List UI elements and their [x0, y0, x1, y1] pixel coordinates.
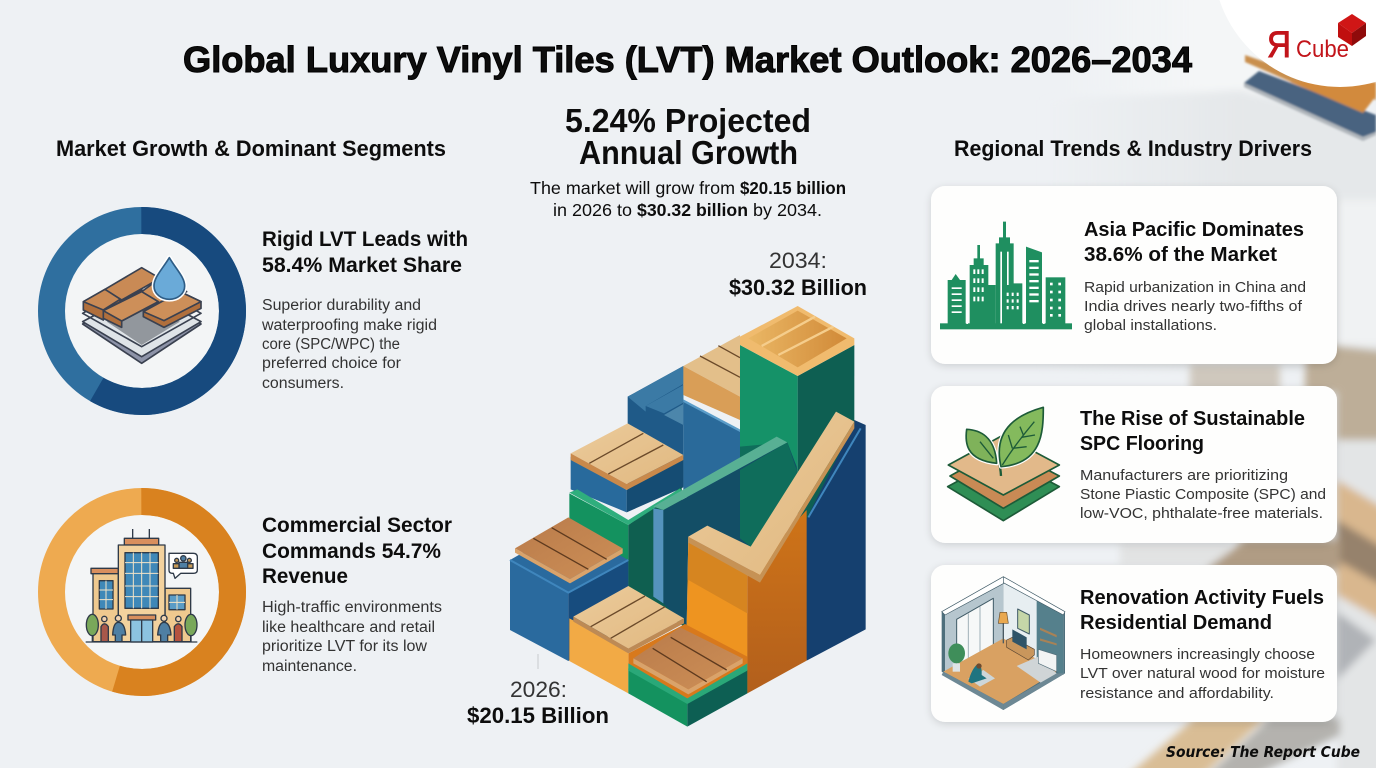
text: commercial description: High-traffic environments — [262, 599, 442, 616]
panel: projected growth — [467, 102, 867, 728]
text: Asia Pacific heading: Asia Pacific Dominates — [1084, 218, 1304, 241]
heading: left: Market Growth & Dominant Segments — [56, 136, 446, 161]
text: commercial description: like healthcare and retail — [262, 619, 435, 636]
chart: isometric rising flooring bars — [510, 306, 866, 727]
icon: commercial building with people — [86, 529, 197, 642]
text: rigid LVT heading: Rigid LVT Leads with — [262, 227, 468, 251]
text: rigid LVT description: consumers. — [262, 375, 344, 392]
text: renovation heading: Renovation Activity Fuels — [1080, 586, 1324, 609]
logo — [1213, 0, 1376, 87]
text: renovation description: LVT over natural wood for moisture — [1080, 665, 1325, 682]
text: sustainable heading: The Rise of Sustainable — [1080, 407, 1305, 430]
icon: flooring layers and water drop — [83, 258, 201, 363]
text: commercial description: maintenance. — [262, 658, 357, 675]
text: renovation heading — [1080, 586, 1324, 634]
bar: blue low left 2026 — [510, 517, 628, 661]
logo: Cube — [1296, 36, 1349, 63]
card: Asia Pacific — [931, 186, 1337, 364]
text: growth summary: by 2034. — [753, 200, 822, 220]
text: renovation description: resistance and affordability. — [1080, 685, 1274, 702]
step: back wood — [683, 335, 740, 420]
text: commercial heading: Commercial Sector — [262, 513, 453, 537]
headline: projected growth: Annual Growth — [579, 134, 798, 171]
text: rigid LVT description: Superior durability and — [262, 297, 421, 314]
source note: Source: The Report Cube — [1166, 743, 1360, 761]
bar: yellow low — [569, 586, 747, 704]
label: 2026 value: $20.15 Billion — [467, 703, 609, 728]
bar: orange with wood check — [687, 412, 854, 693]
text: growth summary: in 2026 to — [553, 200, 632, 220]
headline: projected growth — [565, 102, 811, 171]
text: Asia Pacific heading: 38.6% of the Market — [1084, 243, 1277, 266]
headline: projected growth: 5.24% Projected — [565, 102, 811, 139]
text: renovation heading: Residential Demand — [1080, 611, 1272, 634]
panel: translucent teal wall — [653, 437, 798, 627]
label: 2034 value: 2034: — [769, 248, 827, 273]
bar: green bottom — [628, 627, 747, 727]
bar: far right navy — [793, 420, 866, 661]
text: Asia Pacific heading — [1084, 218, 1304, 266]
text: renovation description: Homeowners increasingly choose — [1080, 646, 1315, 663]
planks behind logo — [1244, 55, 1376, 141]
label: 2026 value — [467, 654, 609, 728]
text: sustainable heading: SPC Flooring — [1080, 432, 1204, 455]
title: Global Luxury Vinyl Tiles (LVT) Market Outlook: 2026–2034 — [183, 39, 1192, 80]
heading: right: Regional Trends & Industry Drivers — [954, 136, 1312, 161]
text: rigid LVT heading: 58.4% Market Share — [262, 253, 462, 277]
text: sustainable description: Manufacturers are prioritizing — [1080, 467, 1288, 484]
text: rigid LVT description: core (SPC/WPC) the — [262, 336, 400, 353]
text: Asia Pacific description: Rapid urbanization in China and — [1084, 279, 1306, 296]
card: sustainable SPC — [931, 386, 1337, 543]
text: rigid LVT heading — [262, 227, 468, 277]
icon: isometric room — [942, 577, 1065, 710]
text: commercial heading: Revenue — [262, 564, 348, 588]
text: growth summary — [530, 178, 846, 220]
text: sustainable description: Stone Piastic Composite (SPC) and — [1080, 486, 1326, 503]
text: sustainable description — [1080, 467, 1326, 522]
text: rigid LVT description: preferred choice for — [262, 355, 401, 372]
logo: Я — [1267, 24, 1291, 65]
text: sustainable description: low-VOC, phthalate-free materials. — [1080, 505, 1323, 522]
label: 2034 value — [729, 248, 867, 300]
text: renovation description — [1080, 646, 1325, 702]
label: 2034 value: $30.32 Billion — [729, 275, 867, 300]
text: Asia Pacific description: India drives nearly two-fifths of — [1084, 298, 1303, 315]
text: growth summary: $20.15 billion — [740, 178, 846, 198]
icon: leaf on flooring layers — [948, 407, 1059, 521]
step: upper wood on blue — [571, 423, 683, 512]
text: rigid LVT description — [261, 297, 437, 392]
text: commercial description — [262, 599, 442, 675]
text: commercial description: prioritize LVT for its low — [262, 638, 428, 655]
panel: market growth and dominant segments — [52, 136, 468, 682]
text: growth summary: The market will grow from — [530, 178, 735, 198]
card: renovation — [931, 565, 1337, 722]
donut: commercial 54.7% — [52, 502, 232, 682]
text: growth summary: $30.32 billion — [637, 200, 748, 220]
text: Asia Pacific description — [1084, 279, 1306, 334]
bar: back blue steps — [628, 366, 740, 547]
text: commercial heading — [262, 513, 453, 588]
bar: tall green 2034 — [740, 306, 854, 547]
text: Asia Pacific description: global installations. — [1084, 317, 1217, 334]
step: green middle — [569, 487, 687, 628]
text: sustainable heading — [1080, 407, 1305, 455]
panel: regional trends and industry drivers — [931, 136, 1337, 722]
donut: rigid LVT 58.4% — [52, 220, 232, 402]
icon: green city skyline — [940, 222, 1072, 329]
text: rigid LVT description: waterproofing make rigid — [261, 317, 437, 334]
label: 2026 value: 2026: — [510, 677, 567, 702]
text: commercial heading: Commands 54.7% — [262, 539, 441, 563]
